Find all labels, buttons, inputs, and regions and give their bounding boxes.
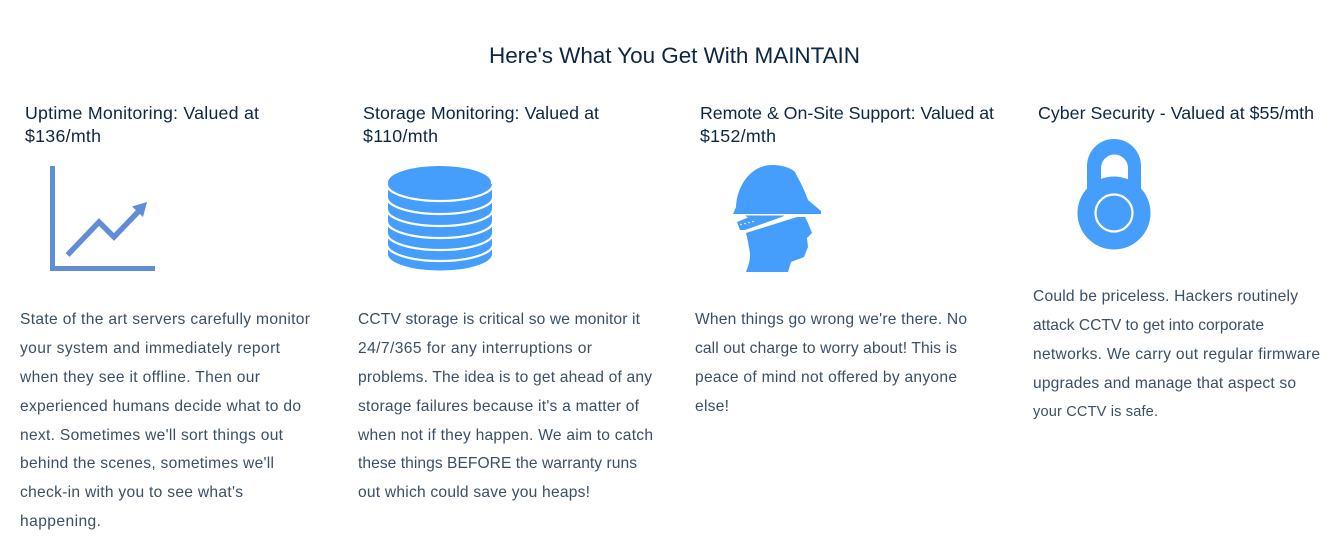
text: storage description: out which could save you heaps!	[358, 484, 590, 501]
text: uptime description: next. Sometimes we'll sort things out	[20, 427, 284, 444]
icon: line chart	[52, 166, 155, 268]
heading: remote and on-site support: $152/mth	[700, 126, 776, 146]
text: cyber security description: Could be priceless. Hackers routinely	[1033, 288, 1298, 305]
icon: storage disk stack	[387, 166, 493, 270]
text: cyber security description: upgrades and manage that aspect so	[1033, 375, 1296, 392]
panel: storage monitoring	[357, 103, 653, 501]
text: cyber security description: networks. We carry out regular firmware	[1033, 346, 1320, 363]
text: storage description: storage failures because it's a matter of	[358, 398, 640, 415]
icon: worker head with hard hat	[733, 165, 821, 272]
text: storage description: problems. The idea is to get ahead of any	[358, 369, 652, 386]
panel: uptime monitoring	[19, 103, 310, 530]
text: support description: When things go wrong we're there. No	[695, 311, 967, 328]
text: storage description: CCTV storage is critical so we monitor it	[358, 311, 641, 328]
heading: storage monitoring	[363, 103, 599, 146]
text: storage description	[357, 311, 653, 501]
heading: uptime monitoring: Uptime Monitoring: Valued at	[25, 103, 259, 123]
panel: cyber security	[1033, 103, 1320, 420]
text: uptime description: check-in with you to see what's	[20, 484, 243, 501]
heading: storage monitoring: $110/mth	[363, 126, 438, 146]
text: uptime description: experienced humans decide what to do	[20, 398, 301, 415]
text: storage description: when not if they happen. We aim to catch	[357, 427, 653, 444]
text: support description: call out charge to worry about! This is	[695, 340, 957, 357]
text: uptime description: State of the art servers carefully monitor	[20, 311, 310, 328]
text: support description	[695, 311, 967, 415]
text: uptime description: when they see it offline. Then our	[19, 369, 260, 386]
text: uptime description: behind the scenes, sometimes we'll	[20, 455, 274, 472]
text: cyber security description: attack CCTV to get into corporate	[1033, 317, 1264, 334]
text: storage description: these things BEFORE the warranty runs	[358, 455, 637, 472]
icon: padlock	[1078, 139, 1150, 250]
text: support description: peace of mind not offered by anyone	[695, 369, 957, 386]
heading: remote and on-site support: Remote & On-Site Support: Valued at	[700, 103, 994, 123]
heading: cyber security: Cyber Security - Valued at $55/mth	[1038, 103, 1314, 123]
heading: remote and on-site support	[700, 103, 994, 146]
text: uptime description	[19, 311, 310, 530]
text: uptime description: happening.	[20, 513, 101, 530]
text: cyber security description	[1033, 288, 1320, 420]
panel: remote and on-site support	[695, 103, 994, 415]
text: cyber security description: your CCTV is safe.	[1033, 404, 1158, 420]
text: storage description: 24/7/365 for any interruptions or	[358, 340, 592, 357]
heading: uptime monitoring	[25, 103, 259, 146]
title: Here's What You Get With MAINTAIN	[489, 43, 860, 68]
heading: uptime monitoring: $136/mth	[25, 126, 101, 146]
heading: storage monitoring: Storage Monitoring: Valued at	[363, 103, 599, 123]
text: uptime description: your system and immediately report	[20, 340, 281, 357]
text: support description: else!	[695, 398, 729, 415]
